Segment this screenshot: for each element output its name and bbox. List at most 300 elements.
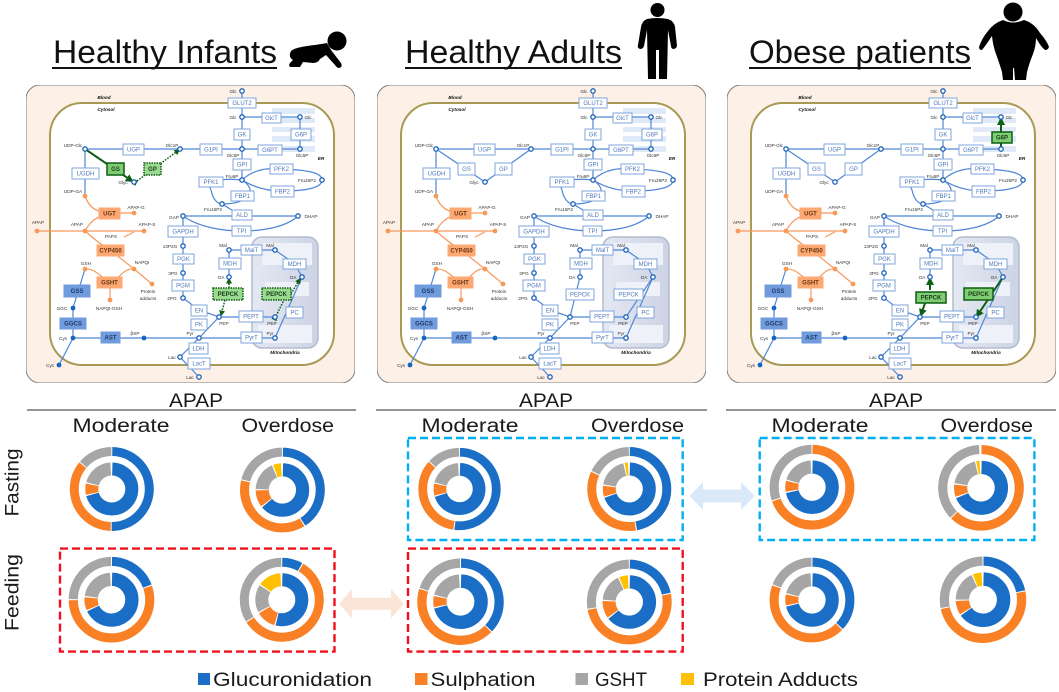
compartment labels: ER <box>318 156 325 161</box>
metabolite labels: Glc1P <box>166 143 178 148</box>
filled blue nodes <box>758 306 847 367</box>
metabolite labels: APAP <box>422 222 434 227</box>
title: Healthy Adults: Healthy Adults <box>405 34 622 70</box>
arrow: infants vs adults feeding <box>339 589 404 618</box>
compartment labels: ER <box>1019 156 1026 161</box>
compartment labels: Cytosol <box>97 107 115 112</box>
metabolite labels: APAP-S <box>840 222 856 227</box>
blood compartment <box>26 85 355 383</box>
metabolite labels: Glyc <box>118 180 128 185</box>
metabolite labels: NAPQI <box>135 260 149 265</box>
metabolite labels: Mal <box>617 243 625 248</box>
metabolite labels: GGC <box>408 306 419 311</box>
metabolite labels: Glyc <box>819 180 829 185</box>
metabolite labels: Glc <box>229 115 237 120</box>
highlighted solid enzyme GS: GS <box>111 167 120 173</box>
enzyme boxes: PFK1 <box>203 180 219 186</box>
enzyme boxes: TPI <box>938 229 947 235</box>
metabolite labels: APAP-S <box>139 222 155 227</box>
enzyme boxes <box>423 98 662 369</box>
enzyme boxes: GLUT2 <box>933 101 953 107</box>
metabolite labels: Glc <box>930 115 938 120</box>
enzyme boxes: MalT <box>596 248 609 254</box>
metabolite labels: APAP <box>383 220 395 225</box>
APAP conjugation enzymes: CYP450 <box>450 248 473 254</box>
metabolite labels: Lac <box>168 355 176 360</box>
metabolite labels: PEP <box>920 321 930 326</box>
enzyme boxes: GPI <box>938 162 948 168</box>
metabolite labels: APAP <box>32 220 44 225</box>
column label: Moderate obese: Moderate <box>772 416 868 437</box>
enzyme boxes: PGM <box>176 284 190 290</box>
compartment labels: ER <box>669 156 676 161</box>
APAP orange edges <box>37 196 152 300</box>
enzyme boxes: PyrT <box>946 336 959 342</box>
enzyme boxes: GlcT <box>966 116 979 122</box>
metabolite labels: OA <box>290 275 297 280</box>
metabolite labels: Glc6P <box>647 153 659 158</box>
enzyme boxes: PC <box>290 310 299 316</box>
highlight box: feeding infants <box>60 549 334 652</box>
enzyme boxes: PGK <box>878 257 891 263</box>
panel: adult pathway map <box>377 85 706 383</box>
APAP orange edges <box>388 196 503 300</box>
metabolite labels: OA <box>218 275 225 280</box>
APAP conjugation enzymes <box>97 208 124 288</box>
enzyme boxes: PFK1 <box>904 180 920 186</box>
enzyme boxes: PGM <box>877 284 891 290</box>
metabolite labels: adducts <box>841 296 858 301</box>
donut: obese fasting moderate <box>774 449 850 525</box>
enzyme boxes: PFK2 <box>625 167 641 173</box>
enzyme boxes: FBP2 <box>626 190 642 196</box>
enzyme boxes: TPI <box>588 229 597 235</box>
metabolite labels: Lac <box>519 355 527 360</box>
metabolite labels: DHAP <box>655 214 669 219</box>
donut: obese feeding moderate <box>774 562 850 638</box>
metabolite labels: PAPS <box>105 234 117 239</box>
metabolite labels: Fru16P2 <box>204 207 222 212</box>
row label: Feeding: Feeding <box>2 554 24 631</box>
mitochondrion <box>953 237 1019 348</box>
enzyme boxes: PGK <box>177 257 190 263</box>
open metabolite nodes <box>83 89 324 379</box>
metabolite labels: adducts <box>491 296 508 301</box>
metabolite labels: Glc6P <box>997 153 1009 158</box>
compartment labels: Blood <box>448 95 462 100</box>
APAP conjugation enzymes <box>448 208 475 288</box>
GSH synthesis enzymes: GGCS <box>765 322 783 328</box>
metabolite labels: 2PG <box>518 296 528 301</box>
metabolite labels: PAPS <box>456 234 468 239</box>
enzyme boxes: FBP2 <box>275 190 291 196</box>
enzyme boxes: PEPT <box>594 314 610 320</box>
metabolite labels <box>733 89 1019 380</box>
column label: Overdose infants: Overdose <box>242 416 334 437</box>
metabolite labels: Glc <box>304 115 312 120</box>
enzyme boxes: GAPDH <box>523 230 545 236</box>
APAP conjugation enzymes: CYP450 <box>800 248 823 254</box>
metabolite labels: Pyr <box>967 331 975 336</box>
metabolite labels: Lac <box>869 355 877 360</box>
cytosol compartment <box>50 103 334 365</box>
GSH synthesis enzymes: GGCS <box>415 322 433 328</box>
metabolite labels: Mal <box>920 243 928 248</box>
metabolite labels: NAPQI <box>486 260 500 265</box>
title: Obese patients: Obese patients <box>749 34 971 70</box>
metabolite labels: Protein <box>842 289 857 294</box>
enzyme boxes: FBP1 <box>936 194 952 200</box>
compartment labels: Blood <box>798 95 812 100</box>
GSH synthesis enzymes <box>761 285 821 343</box>
GSH synthesis enzymes: GSS <box>772 289 784 295</box>
metabolite labels: Pyr <box>887 331 895 336</box>
enzyme boxes <box>72 98 311 369</box>
highlighted enzymes G6P and PEPCK: G6P <box>996 136 1008 142</box>
metabolite labels: PEP <box>219 321 229 326</box>
column label: Overdose adults: Overdose <box>591 416 684 437</box>
highlight box: feeding adults <box>408 549 683 652</box>
enzyme boxes: GK <box>238 132 246 138</box>
metabolite labels: Fru6P <box>577 174 589 179</box>
metabolite labels: Glc <box>580 115 588 120</box>
enzyme boxes: LacT <box>192 362 206 368</box>
filled blue nodes <box>57 306 146 367</box>
donut: infants feeding moderate <box>73 561 150 638</box>
enzyme boxes: GP <box>849 167 858 173</box>
endoplasmic reticulum <box>272 108 315 152</box>
row label: Fasting: Fasting <box>2 448 24 516</box>
enzyme boxes: PC <box>641 310 650 316</box>
metabolite labels: Glc6P <box>578 153 590 158</box>
enzyme boxes: PK <box>195 322 203 328</box>
donut: infants feeding overdose <box>244 562 319 637</box>
metabolite labels: 2PG <box>167 296 177 301</box>
GSH synthesis enzymes: GSS <box>422 289 434 295</box>
donut: adults fasting overdose <box>592 452 667 526</box>
metabolite labels: 13P2G <box>163 244 178 249</box>
metabolite labels: UDP-Glc <box>64 143 83 148</box>
enzyme boxes: LacT <box>893 362 907 368</box>
metabolite labels: APAP-G <box>478 205 496 210</box>
compartment labels <box>97 95 325 355</box>
enzyme boxes: GAPDH <box>873 230 895 236</box>
enzyme boxes: ALD <box>587 213 600 219</box>
cytosol compartment <box>401 103 685 365</box>
metabolite labels: OA <box>569 275 576 280</box>
metabolite labels: Fru6P <box>226 174 238 179</box>
enzyme boxes: GK <box>589 132 597 138</box>
metabolite labels: Cys <box>747 363 756 368</box>
metabolite labels: Glc6P <box>227 153 239 158</box>
enzyme boxes: PK <box>546 322 554 328</box>
highlighted solid enzyme GS <box>107 163 124 175</box>
enzyme boxes: MDH <box>924 262 938 268</box>
APAP orange edges <box>738 196 853 300</box>
metabolite labels: APAP <box>772 222 784 227</box>
metabolite labels: NAPQI-GSH <box>447 306 473 311</box>
enzyme boxes: MalT <box>946 248 959 254</box>
legend: Sulphation: Sulphation <box>430 670 536 691</box>
metabolite labels: GSH <box>432 261 442 266</box>
arrow: adults vs obese fasting <box>690 482 755 510</box>
highlight box: fasting obese <box>760 438 1034 540</box>
enzyme boxes: PFK2 <box>274 167 290 173</box>
metabolite labels: Cys <box>46 363 55 368</box>
metabolite labels: 3PG <box>168 271 178 276</box>
metabolite labels: PEP <box>968 321 978 326</box>
title: Healthy Infants: Healthy Infants <box>53 34 277 70</box>
donut: infants fasting moderate <box>74 452 149 526</box>
enzyme boxes <box>773 98 1007 369</box>
enzyme boxes: PEPCK <box>570 292 590 298</box>
enzyme boxes: MDH <box>639 262 652 268</box>
metabolite labels: NAPQI-GSH <box>96 306 122 311</box>
metabolite labels: GAP <box>520 215 530 220</box>
enzyme boxes: FBP1 <box>235 194 251 200</box>
metabolite labels: Fru16P2 <box>905 207 923 212</box>
panel: infant pathway map <box>26 85 355 383</box>
column label: Moderate adults: Moderate <box>422 416 518 437</box>
metabolite labels: UDP-GA <box>64 189 83 194</box>
metabolite labels: Fru26P2 <box>999 178 1017 183</box>
metabolite labels: Glc <box>1005 115 1013 120</box>
heading: APAP infants: APAP <box>169 390 223 412</box>
metabolite labels: APAP-S <box>490 222 506 227</box>
metabolite labels: Fru26P2 <box>298 178 316 183</box>
endoplasmic reticulum <box>973 108 1016 152</box>
metabolite labels: APAP-G <box>127 205 145 210</box>
metabolite labels: adducts <box>140 296 157 301</box>
enzyme boxes: PEPT <box>243 314 259 320</box>
metabolic edges <box>760 91 1023 377</box>
metabolite labels: GGC <box>57 306 68 311</box>
enzyme boxes: G1PI <box>555 148 569 154</box>
GSH synthesis enzymes: AST <box>104 336 117 342</box>
metabolite labels: Glc6P <box>296 153 308 158</box>
enzyme boxes: PFK1 <box>554 180 570 186</box>
mitochondrion <box>252 237 318 348</box>
metabolite labels: βSP <box>131 331 139 336</box>
APAP conjugation enzymes: UGT <box>804 212 817 218</box>
metabolite labels: Glc <box>930 89 938 94</box>
enzyme boxes: PFK2 <box>975 167 991 173</box>
metabolite labels: PAPS <box>806 234 818 239</box>
enzyme boxes: GS <box>462 167 471 173</box>
metabolite labels: OA <box>641 275 648 280</box>
enzyme boxes: PyrT <box>596 336 609 342</box>
enzyme boxes: LacT <box>543 362 557 368</box>
legend: Protein Adducts: Protein Adducts <box>703 670 858 691</box>
enzyme boxes: G1PI <box>905 148 919 154</box>
legend: Glucuronidation: Glucuronidation <box>213 670 372 691</box>
GSH synthesis enzymes <box>411 285 471 343</box>
metabolite labels: Glc6P <box>928 153 940 158</box>
metabolite labels: Protein <box>492 289 507 294</box>
enzyme boxes: GlcT <box>616 116 629 122</box>
compartment labels: Blood <box>97 95 111 100</box>
enzyme boxes: EN <box>896 308 904 314</box>
metabolite labels: PEP <box>618 321 628 326</box>
metabolite labels: Fru16P2 <box>555 207 573 212</box>
enzyme boxes: GAPDH <box>172 230 194 236</box>
enzyme boxes: GPI <box>588 162 598 168</box>
APAP conjugation enzymes: UGT <box>103 212 116 218</box>
upregulated flux arrows <box>85 149 300 316</box>
enzyme boxes: GK <box>939 132 947 138</box>
metabolite labels: Mal <box>219 243 227 248</box>
filled orange nodes <box>386 194 505 302</box>
blood compartment <box>727 85 1056 383</box>
APAP conjugation enzymes: CYP450 <box>99 248 122 254</box>
highlighted enzymes G6P and PEPCK: PEPCK <box>968 292 990 298</box>
enzyme boxes: FBP1 <box>586 194 602 200</box>
metabolite labels: Mal <box>266 243 274 248</box>
enzyme boxes: G6PT <box>613 148 629 154</box>
enzyme boxes: GP <box>499 167 508 173</box>
metabolite labels: Cys <box>410 336 419 341</box>
donut: obese fasting overdose <box>943 450 1019 526</box>
enzyme boxes: ALD <box>236 213 249 219</box>
metabolite labels: UDP-GA <box>415 189 434 194</box>
enzyme boxes: FBP2 <box>976 190 992 196</box>
compartment labels <box>798 95 1026 355</box>
metabolite labels: 3PG <box>519 271 529 276</box>
enzyme boxes: EN <box>195 308 203 314</box>
upregulated flux arrows <box>921 119 1003 316</box>
enzyme boxes: TPI <box>237 229 246 235</box>
metabolite labels: Pyr <box>617 331 625 336</box>
metabolite labels: Glyc <box>469 180 479 185</box>
metabolite labels: Cys <box>397 363 406 368</box>
enzyme boxes: G6P <box>295 132 307 138</box>
metabolite labels: DHAP <box>1005 214 1019 219</box>
highlight box: fasting adults <box>408 438 683 540</box>
compartment labels: Mitochondria <box>971 350 1001 355</box>
metabolite labels: Cys <box>59 336 68 341</box>
enzyme boxes: EN <box>546 308 554 314</box>
metabolite labels <box>32 89 318 380</box>
enzyme boxes: UGDH <box>778 172 795 178</box>
enzyme boxes: MalT <box>245 248 258 254</box>
metabolite labels <box>383 89 669 380</box>
metabolite labels: Glc <box>229 89 237 94</box>
icon: obese silhouette <box>979 2 1049 80</box>
metabolite labels: 3PG <box>869 271 879 276</box>
metabolite labels: PEP <box>267 321 277 326</box>
filled orange nodes <box>35 194 154 302</box>
APAP conjugation enzymes: GSHT <box>452 280 469 286</box>
APAP conjugation enzymes: UGT <box>454 212 467 218</box>
metabolite labels: Lac <box>186 375 194 380</box>
metabolite labels: Protein <box>141 289 156 294</box>
filled blue nodes <box>408 306 497 367</box>
donut: adults feeding moderate <box>422 563 499 640</box>
metabolite labels: DHAP <box>304 214 318 219</box>
blood compartment <box>377 85 706 383</box>
enzyme boxes: MDH <box>223 262 237 268</box>
compartment labels <box>448 95 676 355</box>
GSH synthesis enzymes: AST <box>806 336 818 342</box>
enzyme boxes: UGDH <box>77 172 94 178</box>
GSH synthesis enzymes <box>60 285 120 343</box>
APAP conjugation enzymes: GSHT <box>802 280 819 286</box>
metabolite labels: βSP <box>482 331 490 336</box>
cytosol compartment <box>751 103 1035 365</box>
enzyme boxes: GLUT2 <box>583 101 603 107</box>
enzyme boxes: MDH <box>989 262 1002 268</box>
highlighted dotted enzymes GP and PEPCK: GP <box>148 167 157 173</box>
metabolite labels: 13P2G <box>514 244 529 249</box>
metabolite labels: NAPQI-GSH <box>797 306 823 311</box>
metabolite labels: Pyr <box>266 331 274 336</box>
metabolite labels: βSP <box>832 331 840 336</box>
open metabolite nodes <box>434 89 675 379</box>
compartment labels: Cytosol <box>798 107 816 112</box>
donut: infants fasting overdose <box>245 452 320 528</box>
column label: Moderate infants: Moderate <box>72 416 170 437</box>
heading: APAP adults: APAP <box>519 390 573 412</box>
legend <box>198 670 858 691</box>
metabolite labels: APAP <box>733 220 745 225</box>
enzyme boxes: PEPT <box>944 314 960 320</box>
enzyme boxes: ALD <box>937 213 950 219</box>
metabolite labels: Glc1P <box>517 143 529 148</box>
metabolite labels: UDP-Glc <box>415 143 434 148</box>
metabolite labels: Mal <box>967 243 975 248</box>
mitochondrion <box>603 237 669 348</box>
legend: GSHT: GSHT <box>595 670 647 691</box>
enzyme boxes: MDH <box>288 262 301 268</box>
compartment labels: Mitochondria <box>270 350 300 355</box>
enzyme boxes: LDH <box>192 346 205 352</box>
highlighted dotted enzymes GP and PEPCK <box>144 163 291 300</box>
metabolite labels: Glc <box>655 115 663 120</box>
highlighted enzymes G6P and PEPCK <box>916 132 1012 303</box>
heading: APAP obese: APAP <box>869 390 923 412</box>
metabolite labels: GSH <box>81 261 91 266</box>
metabolite labels: Pyr <box>186 331 194 336</box>
enzyme boxes: LDH <box>893 346 906 352</box>
APAP conjugation enzymes <box>798 208 825 288</box>
enzyme boxes: GS <box>812 167 821 173</box>
metabolite labels: Glc1P <box>867 143 879 148</box>
enzyme boxes: GlcT <box>265 116 278 122</box>
enzyme boxes: G6P <box>646 132 658 138</box>
enzyme boxes: G6PT <box>262 148 278 154</box>
donut: adults fasting moderate <box>423 452 496 526</box>
metabolite labels: UDP-Glc <box>765 143 784 148</box>
metabolic edges <box>59 91 322 377</box>
enzyme boxes: MDH <box>574 262 588 268</box>
highlighted dotted enzymes GP and PEPCK: PEPCK <box>266 292 288 298</box>
enzyme boxes: PC <box>991 310 1000 316</box>
enzyme boxes: UGDH <box>428 172 445 178</box>
enzyme boxes: G6PT <box>963 148 979 154</box>
metabolite labels: OA <box>919 275 926 280</box>
filled orange nodes <box>736 194 855 302</box>
enzyme boxes: PyrT <box>245 336 258 342</box>
metabolite labels: 2PG <box>868 296 878 301</box>
panel: obese pathway map <box>727 85 1056 383</box>
APAP conjugation enzymes: GSHT <box>101 280 118 286</box>
donut: adults feeding overdose <box>591 564 667 640</box>
metabolite labels: Cys <box>760 336 769 341</box>
highlighted dotted enzymes GP and PEPCK: PEPCK <box>218 292 239 298</box>
donut: obese feeding overdose <box>944 561 1022 638</box>
icon: crawling baby <box>289 32 346 68</box>
metabolite labels: Pyr <box>537 331 545 336</box>
